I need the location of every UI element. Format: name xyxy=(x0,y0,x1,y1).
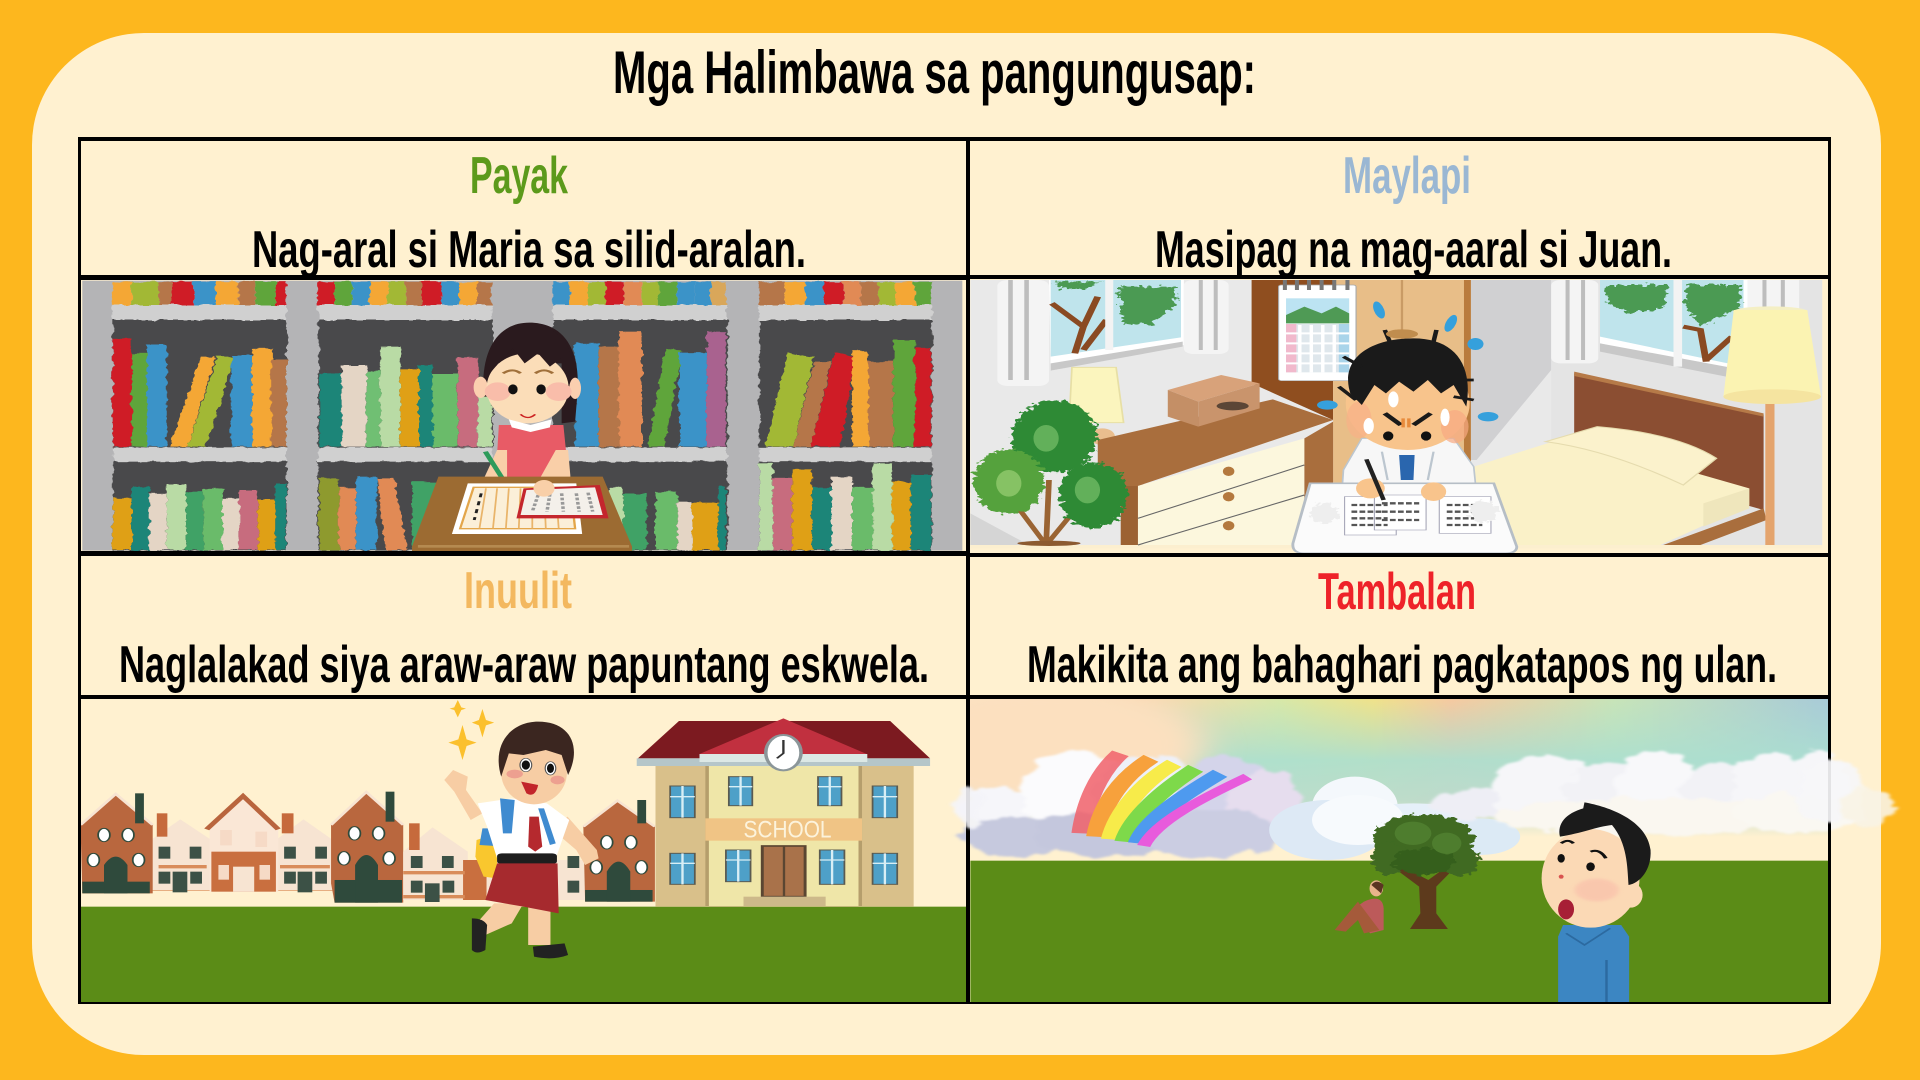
school building: SCHOOL xyxy=(744,816,832,843)
text: Maylapi sentence: Masipag na mag-aaral si Juan. xyxy=(1155,221,1672,279)
title: Mga Halimbawa sa pangungusap: xyxy=(613,39,1256,106)
boy looking up xyxy=(1542,802,1651,1003)
boy with papers xyxy=(1293,301,1517,553)
dresser with box and lamp xyxy=(1069,367,1333,545)
grass xyxy=(970,861,1829,1003)
illustration: girl studying in library xyxy=(82,281,962,554)
seated person xyxy=(1335,880,1384,933)
bookshelves with books xyxy=(113,282,932,551)
peach haze xyxy=(970,699,1224,794)
left window xyxy=(997,280,1229,386)
white cloud xyxy=(1269,777,1520,860)
table grid lines xyxy=(78,137,1831,1004)
tree xyxy=(1371,814,1479,929)
sky xyxy=(969,698,1829,862)
boy walking xyxy=(444,700,599,958)
illustration: boy walking to school xyxy=(79,700,968,1003)
calendar xyxy=(1279,280,1356,381)
panel: Maylapi heading: Maylapi xyxy=(1343,147,1471,205)
girl figure xyxy=(474,323,581,492)
panel: Tambalan heading: Tambalan xyxy=(1318,563,1476,621)
cloud wisp over table border xyxy=(956,758,1894,827)
text: Inuulit sentence: Naglalakad siya araw-araw papuntang eskwela. xyxy=(119,636,929,694)
panel: Payak heading: Payak xyxy=(470,147,568,205)
right cloud bank xyxy=(1431,750,1866,835)
rainbow xyxy=(1081,753,1248,846)
floor lamp xyxy=(1723,306,1821,404)
plant xyxy=(973,401,1128,546)
right window xyxy=(1551,280,1799,378)
illustration: rainbow, tree and boy looking up xyxy=(954,699,1856,1002)
desk with paper and book xyxy=(412,477,632,554)
left clouds xyxy=(960,750,1300,858)
row of houses xyxy=(81,791,655,903)
school building xyxy=(637,718,930,907)
bed xyxy=(1474,372,1775,545)
grass xyxy=(79,907,968,1003)
illustration: boy studying in bedroom xyxy=(970,280,1822,553)
text: Payak sentence: Nag-aral si Maria sa silid-aralan. xyxy=(252,221,806,279)
wardrobe xyxy=(1252,280,1471,547)
panel: Inuulit heading: Inuulit xyxy=(464,562,572,620)
